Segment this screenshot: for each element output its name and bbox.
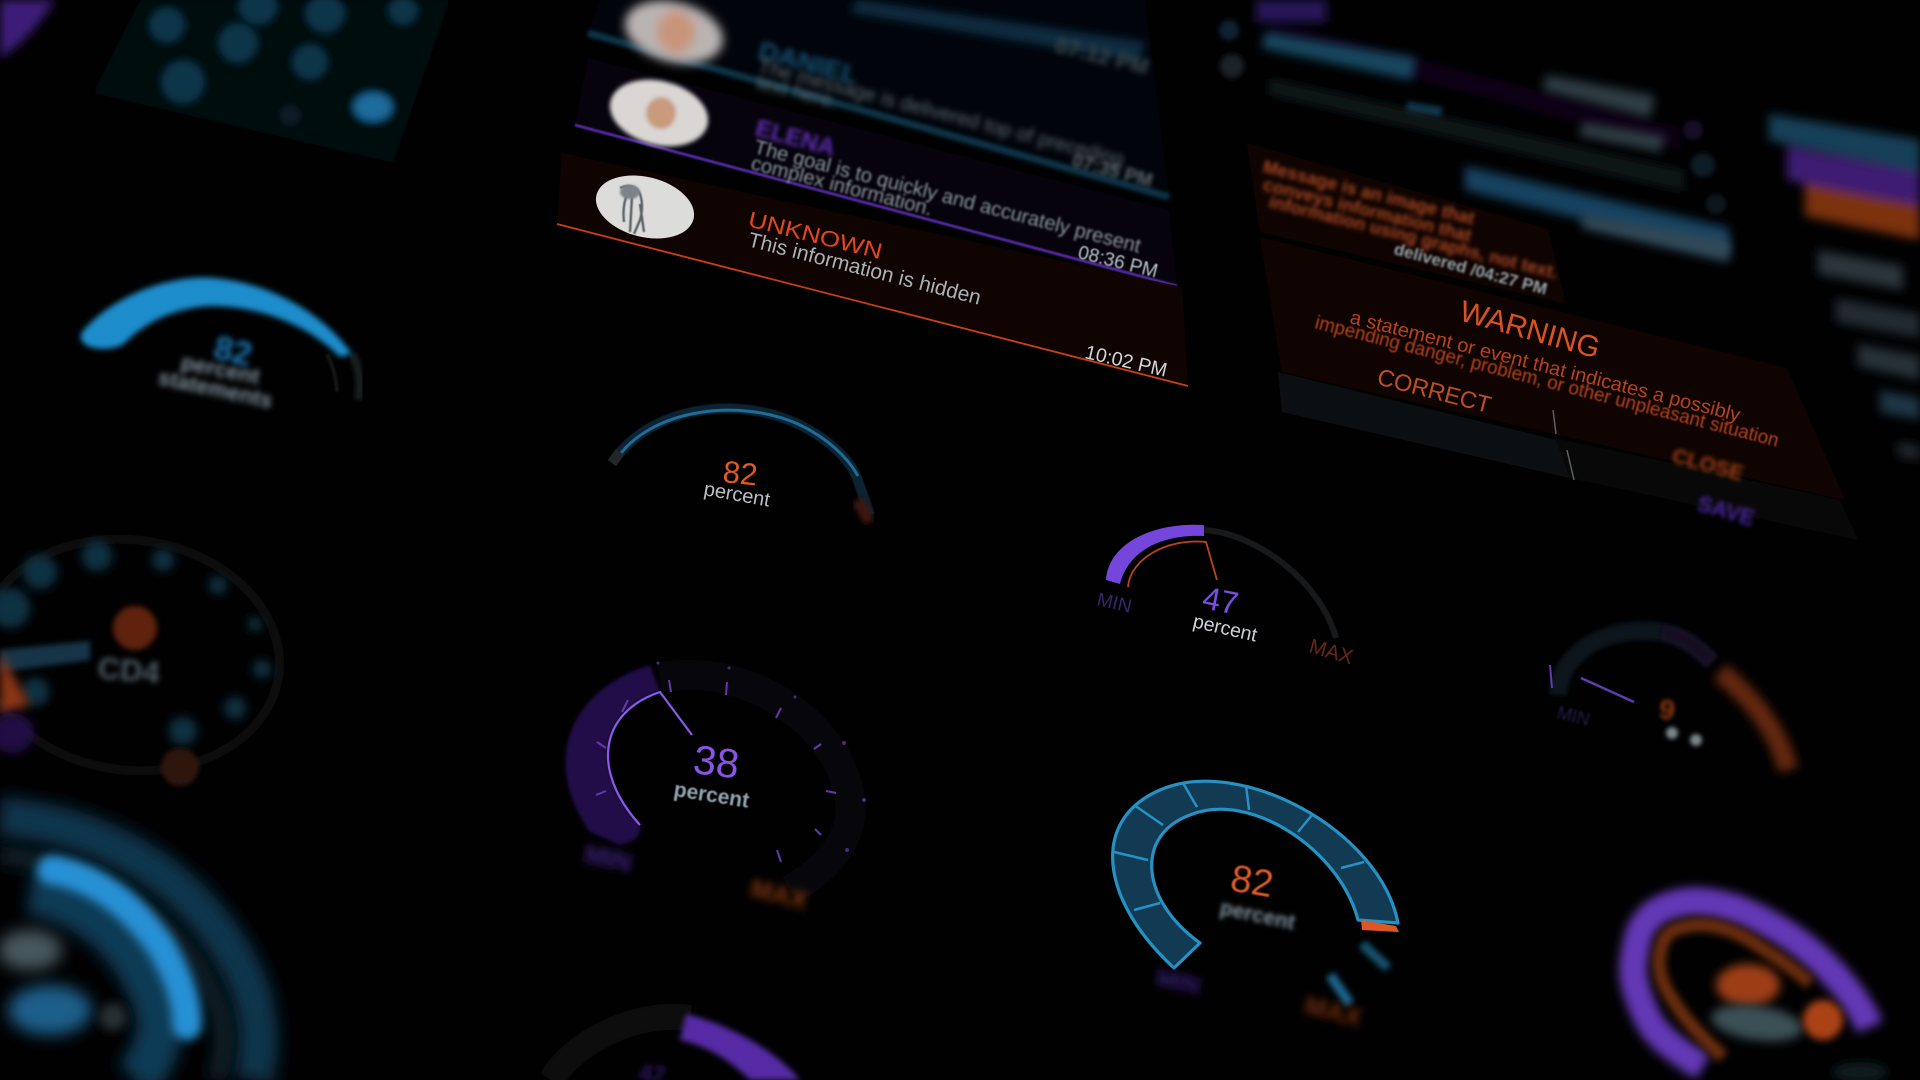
value: 82: 82 [721,454,759,493]
timestamp: 08:36: 08:36 PM [1076,242,1160,283]
panel: blurred dot map [93,0,450,163]
name: Elena: ELENA [752,115,838,162]
label: max: MAX [1307,635,1356,669]
message text: blurred: text here. [754,72,840,114]
label: max blurred: MAX [748,873,812,916]
corner accent: purple [0,0,55,58]
small label: blurred [99,1003,127,1031]
heading: warning: WARNING [1456,295,1604,365]
avatar: Elena [603,70,715,156]
warning text: a statement or event that indicates a possibly [1348,307,1743,426]
caption: percent: percent [702,478,772,512]
label: min blurred: MIN [582,839,635,878]
label: max blurred: MAX [1302,990,1366,1033]
gauge: segmented blue 82 percent [1113,781,1399,1033]
avatar: Unknown [589,166,701,248]
timestamp: 07:35: 07:35 PM [1070,151,1155,192]
value: blurred [8,985,92,1035]
panel: Elena message row [575,58,1177,286]
note text: blurred orange: information using graphs, not text. [1267,191,1560,283]
delivered timestamp: delivered /04:27 PM [1392,240,1549,299]
message: Unknown: This information is hidden [746,229,983,310]
panel: blurred top-right message bars [1219,0,1729,262]
lower element: blurred teal [1832,1062,1888,1080]
warning text: impending danger, problem, or other unpleasant situation [1313,312,1781,452]
label: min: MIN [1555,702,1592,730]
value: 82: 82 [210,329,256,374]
caption: blurred: percent [179,349,262,389]
value: 38: 38 [691,736,742,787]
caption: percent: percent [1218,896,1297,935]
note text: blurred orange: conveys information that [1261,174,1474,246]
timestamp: blurred: 07:12 PM [1053,33,1151,80]
value: 47: 47 [1200,580,1241,622]
indicator: orange dot [1803,1000,1843,1040]
message text: blurred: The message is delivered top of preceding [756,56,1126,171]
panel: Unknown message row [557,153,1188,386]
message: Elena: The goal is to quickly and accurately present [752,137,1143,258]
timestamp: 10:02: 10:02 PM [1083,341,1169,382]
value: 82: 82 [1227,858,1276,906]
panel: delivered orange note [1247,143,1566,304]
value: blurred [1716,964,1780,1006]
caption: percent: percent [1191,610,1260,647]
gauge: 47 percent with min and max [1095,525,1356,669]
panel: blurred far-right list [1769,114,1920,460]
caption: blurred: statements [156,364,275,413]
caption: blurred [1709,1000,1805,1046]
gauge: large blurred blue bottom-left [0,817,258,1080]
label: min: MIN [1095,589,1134,618]
button: close: CLOSE [1670,445,1746,486]
avatar: blurred portrait [618,0,730,73]
caption: blurred [1666,727,1702,746]
gauge: 38 percent needle dial [566,662,866,916]
caption: percent: percent [672,778,751,813]
button: correct: CORRECT [1375,364,1494,418]
panel: warning dialog [1260,237,1858,540]
value: 9: 9 [1657,693,1677,726]
gauge: top center 82 percent [612,409,870,522]
gauge: purple bottom-right [1633,901,1888,1080]
name: Unknown: UNKNOWN [746,207,885,264]
name: blurred blue: DANIEL [756,36,862,90]
note text: blurred orange: Message is an image that [1261,156,1477,228]
gauge: blurred 9 far right [1550,631,1788,770]
message: Elena: complex information. [749,153,935,220]
panel: blue message row [588,0,1169,197]
caption: blurred [0,930,62,970]
button: save: SAVE [1695,491,1758,531]
value: blurred: CD4 [96,650,162,690]
label: min blurred: MIN [1154,964,1202,1000]
gauge: purple bottom-center [551,1014,800,1080]
gauge: blurred blue 82 top-left [81,278,360,413]
gauge: blurred dotted dial left [0,520,295,790]
